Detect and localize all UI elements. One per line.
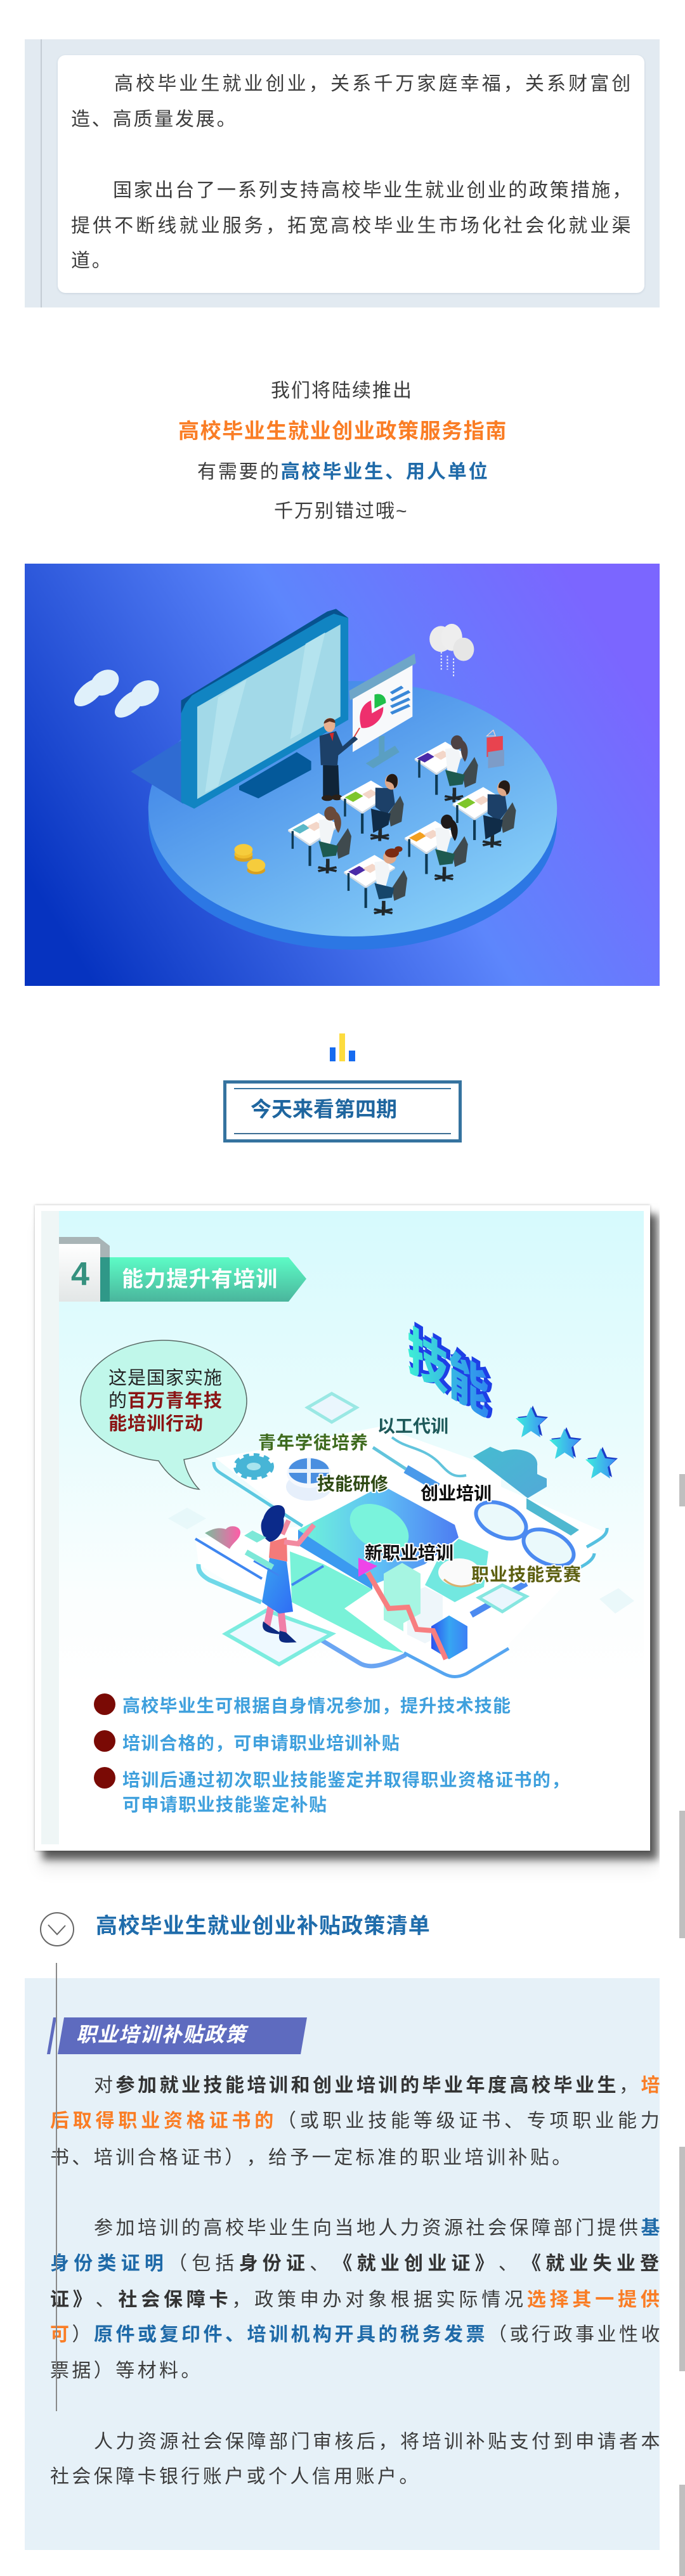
series announcement text: 我们将陆续推出 [271, 380, 413, 401]
3D title: skills: 技能 [407, 1319, 489, 1427]
training type labels: 技能研修 [317, 1474, 388, 1494]
intro text: 高校毕业生就业创业，关系千万家庭幸福，关系财富创 [114, 74, 633, 94]
timeline line [56, 1963, 57, 2411]
training type labels: 创业培训 [421, 1484, 492, 1503]
policy text [50, 2074, 663, 2487]
teacher [320, 718, 360, 801]
3D title: skills: 技能 [410, 1318, 492, 1426]
isometric platforms [195, 1427, 607, 1677]
speech bubble: 能培训行动 [108, 1413, 204, 1434]
intro text [71, 74, 634, 271]
monitor [131, 609, 348, 809]
series announcement text: 有需要的高校毕业生、用人单位 [197, 462, 490, 482]
illustration: isometric classroom [25, 564, 660, 986]
policy text: 证》、社会保障卡，政策申办对象根据实际情况选择其一提供 [50, 2289, 663, 2310]
policy text: 身份类证明（包括身份证、《就业创业证》、《就业失业登 [50, 2253, 663, 2274]
right scroll marks [679, 1474, 685, 2576]
panel: intro [25, 39, 660, 307]
heart and small tiles [205, 1526, 279, 1576]
series announcement text: 千万别错过哦~ [274, 501, 408, 522]
speech bubble: 的百万青年技 [108, 1390, 223, 1411]
training type labels [258, 1416, 582, 1584]
policy text: 参加培训的高校毕业生向当地人力资源社会保障部门提供基 [94, 2218, 663, 2239]
heading: subsidy policy list: 高校毕业生就业创业补贴政策清单 [96, 1914, 431, 1938]
cloud right with rain [429, 624, 474, 676]
students at desks [288, 735, 516, 916]
intro card [58, 55, 644, 293]
section tab: 能力提升有培训 [122, 1267, 278, 1291]
policy text: 可）原件或复印件、培训机构开具的税务发票（或行政事业性收 [50, 2324, 663, 2345]
training type labels: 新职业培训 [365, 1543, 453, 1563]
clouds left [68, 666, 164, 722]
policy text: 对参加就业技能培训和创业培训的毕业年度高校毕业生，培 [94, 2075, 663, 2096]
growth chart [358, 1558, 467, 1659]
gear and fan [235, 1455, 332, 1501]
series announcement text [178, 380, 507, 522]
ribbon: vocational training subsidy [47, 2017, 307, 2054]
button: issue title [223, 1080, 462, 1142]
speech bubble [81, 1340, 247, 1489]
tool strips, server and glasses [373, 1437, 580, 1586]
bullet list [94, 1693, 570, 1815]
speech bubble: 这是国家实施 [108, 1368, 223, 1388]
woman presenter [226, 1505, 332, 1664]
mouse [341, 1494, 417, 1562]
intro text: 国家出台了一系列支持高校毕业生就业创业的政策措施， [113, 180, 633, 201]
whiteboard with pie chart [349, 654, 416, 768]
icon: bar chart [330, 1033, 355, 1061]
intro text: 造、高质量发展。 [71, 109, 237, 130]
policy text: 社会保障卡银行账户或个人信用账户。 [50, 2466, 421, 2487]
clip: poster card with shadow [33, 1203, 660, 1871]
series announcement text: 高校毕业生就业创业政策服务指南 [178, 419, 507, 443]
policy text: 人力资源社会保障部门审核后，将培训补贴支付到申请者本 [94, 2431, 663, 2452]
panel: subsidy policy [25, 1978, 660, 2550]
training type labels: 以工代训 [377, 1416, 448, 1436]
policy text: 书、培训合格证书），给予一定标准的职业培训补贴。 [50, 2147, 574, 2168]
diamonds [168, 1394, 634, 1614]
left margin strip [41, 1211, 59, 1844]
platform disc [148, 681, 557, 950]
section tab [59, 1237, 306, 1302]
training type labels: 青年学徒培养 [258, 1433, 369, 1453]
bullet list: 可申请职业技能鉴定补贴 [122, 1795, 327, 1815]
ribbon: vocational training subsidy: 职业培训补贴政策 [76, 2023, 249, 2046]
poster card [35, 1205, 650, 1851]
icon: chevron circle [40, 1912, 74, 1946]
poster illustration and labels [59, 1237, 634, 1815]
bullet list: 培训合格的，可申请职业培训补贴 [122, 1733, 400, 1753]
poster background [41, 1211, 644, 1844]
shopping bags [486, 730, 504, 768]
policy text: 后取得职业资格证书的（或职业技能等级证书、专项职业能力 [50, 2111, 663, 2132]
bullet list: 高校毕业生可根据自身情况参加，提升技术技能 [122, 1696, 511, 1716]
training type labels: 职业技能竞赛 [471, 1564, 582, 1584]
stars [516, 1406, 618, 1479]
policy text: 票据）等材料。 [50, 2360, 203, 2381]
bullet list: 培训后通过初次职业技能鉴定并取得职业资格证书的， [122, 1770, 570, 1790]
section tab: 4 [71, 1256, 89, 1293]
intro text: 提供不断线就业服务，拓宽高校毕业生市场化社会化就业渠 [71, 216, 634, 236]
button: issue title: 今天来看第四期 [251, 1097, 397, 1121]
intro text: 道。 [71, 250, 113, 271]
coins [234, 844, 265, 874]
